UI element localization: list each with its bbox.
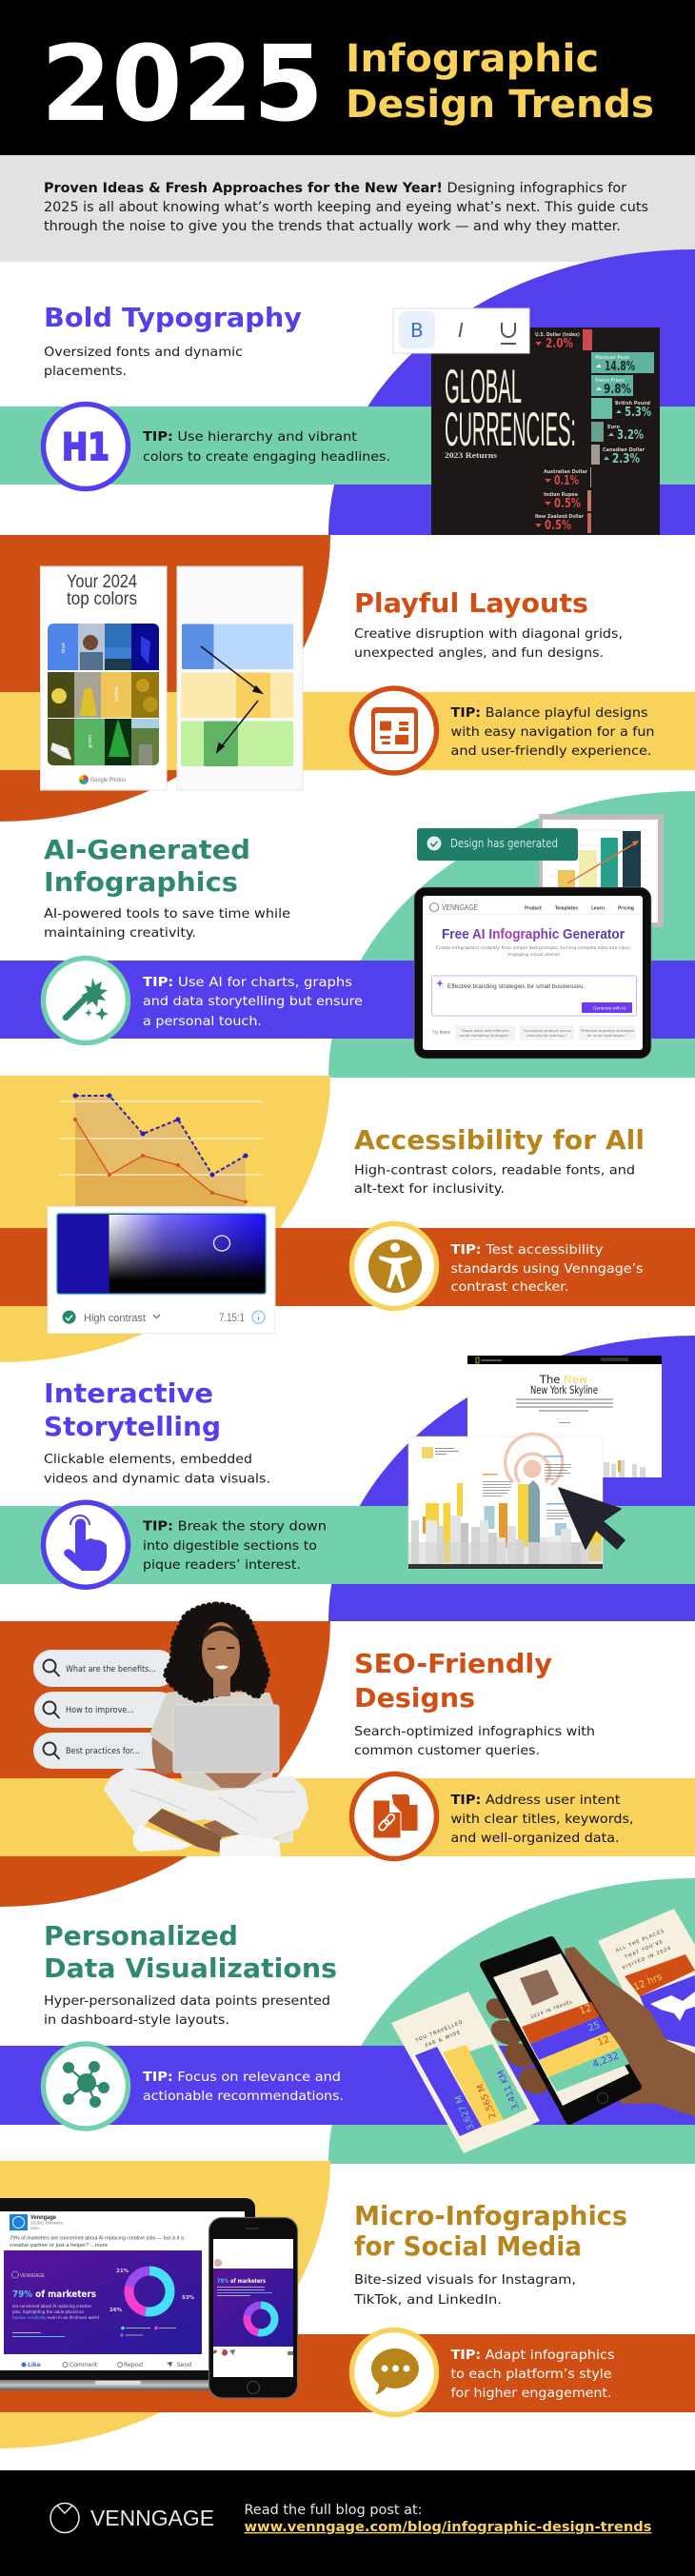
laptop with linkedin post: are concerned about AI replacing creative xyxy=(12,2304,92,2308)
tip: pique readers’ interest. xyxy=(143,1557,301,1573)
tablet: AI infographic generator: planning for startups." xyxy=(526,1033,567,1038)
tip: TIP: Focus on relevance and xyxy=(143,2070,341,2085)
tip: and well-organized data. xyxy=(451,1831,619,1846)
right travel card: 12 hrs xyxy=(632,1972,664,1993)
panel: personalized data visualizations xyxy=(0,1878,695,2164)
description: in dashboard-style layouts. xyxy=(44,2012,229,2028)
tablet: AI infographic generator: Pricing xyxy=(618,906,634,912)
global currencies chart image: 3.2% xyxy=(617,427,644,443)
global currencies chart image: New Zealand Dollar xyxy=(535,514,584,520)
description: Creative disruption with diagonal grids, xyxy=(354,626,623,642)
search query pills: What are the benefits... xyxy=(66,1665,156,1674)
global currencies chart image: U.S. Dollar (Index) xyxy=(535,332,580,338)
global currencies chart image: GLOBAL xyxy=(445,360,522,413)
heading xyxy=(44,1378,221,1442)
tip xyxy=(451,1242,644,1295)
tip xyxy=(143,429,390,465)
blog post link: Read the full blog post at: xyxy=(244,2503,423,2518)
tablet: AI infographic generator: Learn xyxy=(591,906,605,912)
title: Infographic Design Trends xyxy=(346,37,654,127)
global currencies chart image: 2.3% xyxy=(612,451,640,466)
description: AI-powered tools to save time while xyxy=(44,906,290,921)
tip: contrast checker. xyxy=(451,1279,569,1295)
blog post link xyxy=(244,2503,651,2535)
tip: TIP: Test accessibility xyxy=(451,1242,604,1258)
tip: actionable recommendations. xyxy=(143,2089,344,2104)
tablet: AI infographic generator: for small businesses." xyxy=(587,1033,627,1038)
title: Infographic Design Trends: Infographic xyxy=(346,37,599,81)
contrast checker card xyxy=(48,1207,275,1333)
laptop with linkedin post: 79% of marketers are concerned about AI replacing creative jobs — but is it a xyxy=(10,2235,185,2241)
laptop with linkedin post: Comment xyxy=(70,2362,98,2368)
laptop with linkedin post: 53% xyxy=(182,2295,195,2301)
card: top colors photo grid: blue xyxy=(61,643,67,653)
description xyxy=(354,626,623,661)
heading: SEO-Friendly xyxy=(354,1649,552,1679)
tip: and data storytelling but ensure xyxy=(143,994,363,1009)
global currencies chart image: 0.5% xyxy=(545,518,571,533)
icon: layout xyxy=(352,688,436,773)
global currencies chart image: 2.0% xyxy=(546,336,573,351)
venngage logo xyxy=(50,2504,214,2532)
global currencies chart image: 0.5% xyxy=(554,496,581,511)
right travel card: ALL THE PLACES xyxy=(615,1929,665,1954)
tip: into digestible sections to xyxy=(143,1538,317,1554)
laptop with linkedin post: human creativity even in an AI-driven world xyxy=(12,2315,99,2320)
laptop with linkedin post: Like xyxy=(28,2362,41,2368)
intro panel: Proven Ideas & Fresh Approaches for the New Year! Designing infographics for xyxy=(44,181,626,196)
heading: Personalized xyxy=(44,1921,238,1952)
tablet: AI infographic generator: Free AI Infographic Generator xyxy=(442,926,625,942)
tablet: AI infographic generator: "Boost sales with effective xyxy=(461,1028,509,1033)
heading: Bold Typography xyxy=(44,303,302,333)
card: top colors photo grid xyxy=(40,566,167,790)
laptop with linkedin post: Send xyxy=(177,2362,191,2368)
phone: travel report xyxy=(484,1940,638,2121)
tip: TIP: Balance playful designs xyxy=(451,705,647,721)
phone with instagram post: 79% of marketers xyxy=(217,2278,266,2285)
global currencies chart image: 2023 Returns xyxy=(445,451,497,460)
description xyxy=(354,1724,595,1758)
tip: with easy navigation for a fun xyxy=(451,724,655,740)
global currencies chart image: Canadian Dollar xyxy=(603,447,645,453)
laptop with linkedin post xyxy=(0,2198,255,2390)
global currencies chart image xyxy=(431,327,660,535)
phone: travel report: 12 xyxy=(578,2003,593,2017)
search query pills: Best practices for... xyxy=(66,1747,140,1756)
callout text blocks xyxy=(483,1456,571,1519)
description: videos and dynamic data visuals. xyxy=(44,1472,270,1487)
laptop with linkedin post: 26% xyxy=(109,2308,123,2313)
skyline buildings xyxy=(408,1480,603,1569)
icon: H1 xyxy=(44,404,128,489)
panel: ai-generated infographics xyxy=(0,791,695,1078)
laptop with linkedin post: 21% xyxy=(116,2269,129,2274)
laptop with linkedin post: 10,991 followers xyxy=(30,2220,64,2226)
badge: design has generated: Design has generated xyxy=(450,836,558,850)
laptop with linkedin post: Repost xyxy=(124,2362,144,2368)
description: Bite-sized visuals for Instagram, xyxy=(354,2272,576,2288)
icon: H1: H1 xyxy=(62,426,109,469)
contrast checker card: 7.15:1 xyxy=(219,1311,245,1324)
description: Hyper-personalized data points presented xyxy=(44,1993,330,2009)
card: diagonal layout diagram xyxy=(177,566,303,790)
tip: TIP: Use hierarchy and vibrant xyxy=(143,429,357,445)
cursor arrow xyxy=(559,1488,625,1549)
panel: seo-friendly designs xyxy=(0,1604,695,1907)
description xyxy=(354,1163,635,1197)
description xyxy=(44,1993,330,2028)
laptop with linkedin post: 1mo · xyxy=(30,2226,42,2230)
header banner xyxy=(0,0,695,155)
tip: TIP: Address user intent xyxy=(451,1793,621,1808)
line chart xyxy=(59,1093,263,1209)
title: 2025: 2025 xyxy=(41,23,324,145)
panel: bold typography xyxy=(0,249,695,535)
global currencies chart image: 14.8% xyxy=(605,359,635,374)
tip: TIP: Use AI for charts, graphs xyxy=(143,975,352,990)
heading xyxy=(354,1649,552,1714)
search query pills: How to improve... xyxy=(66,1706,134,1715)
description xyxy=(44,906,290,941)
global currencies chart image: 9.8% xyxy=(604,382,631,397)
card: top colors photo grid: Your 2024 xyxy=(67,572,137,592)
heading xyxy=(354,2201,627,2262)
tablet: AI infographic generator: Effective branding strategies for small businesses. xyxy=(447,984,585,990)
tablet: AI infographic generator: VENNGAGE xyxy=(442,903,478,912)
left travel card: 3,627 M xyxy=(453,2093,477,2131)
tip xyxy=(451,1793,634,1846)
phone: travel report: 4,232 xyxy=(591,2051,621,2071)
tablet: AI infographic generator: Try these xyxy=(432,1030,450,1036)
description: common customer queries. xyxy=(354,1743,540,1758)
search query pills xyxy=(33,1650,177,1769)
panel: interactive storytelling xyxy=(0,1336,695,1621)
heading: Micro-Infographics xyxy=(354,2201,627,2231)
icon: network nodes xyxy=(44,2044,128,2129)
intro panel: 2025 is all about knowing what’s worth keeping and eyeing what’s next. This guide cuts xyxy=(44,200,648,215)
description: alt-text for inclusivity. xyxy=(354,1181,505,1197)
right travel card xyxy=(598,1909,695,2056)
laptop with linkedin post: VENNGAGE xyxy=(20,2273,46,2279)
venngage logo: VENNGAGE xyxy=(90,2506,214,2530)
description: Search-optimized infographics with xyxy=(354,1724,595,1739)
footer xyxy=(0,2470,695,2576)
card: top colors photo grid: yellow xyxy=(114,686,120,702)
tip: TIP: Break the story down xyxy=(143,1519,327,1535)
heading: Data Visualizations xyxy=(44,1953,337,1984)
right travel card: THAT YOU'VE xyxy=(623,1939,665,1961)
tip xyxy=(451,705,655,759)
left travel card: FAR & WIDE xyxy=(425,2030,462,2049)
card: top colors photo grid: Google Photos xyxy=(90,777,127,783)
hand holding phone xyxy=(483,1947,695,2116)
laptop with linkedin post: jobs, highlighting the value placed on xyxy=(11,2309,84,2314)
text format toolbar: B xyxy=(410,319,424,342)
radar rings xyxy=(506,1434,563,1485)
bar chart card xyxy=(539,814,664,927)
tip: for higher engagement. xyxy=(451,2386,611,2401)
phone: travel report: 2024 IN TRAVEL xyxy=(530,1999,574,2020)
tablet: AI infographic generator: Templates xyxy=(555,906,578,912)
global currencies chart image: British Pound xyxy=(615,401,650,406)
tip: with clear titles, keywords, xyxy=(451,1812,634,1827)
icon: linked documents xyxy=(352,1774,436,1858)
woman with laptop xyxy=(105,1604,308,1856)
text format toolbar: I xyxy=(458,319,464,342)
tip xyxy=(143,2070,344,2104)
tip: colors to create engaging headlines. xyxy=(143,449,390,465)
screenshot: new york skyline intro xyxy=(467,1356,662,1477)
global currencies chart image: Mexican Peso xyxy=(595,355,629,361)
panel: playful layouts xyxy=(0,535,695,822)
description: Oversized fonts and dynamic xyxy=(44,345,243,360)
heading: Infographics xyxy=(44,867,238,898)
tablet: AI infographic generator: "Effective branding strategies xyxy=(580,1028,634,1033)
icon: tapping hand xyxy=(44,1502,128,1587)
screenshot: interactive skyline xyxy=(408,1434,603,1569)
tablet: AI infographic generator: "Innovative product launch xyxy=(523,1028,572,1033)
left travel card: 3,411 KM xyxy=(496,2068,522,2111)
description xyxy=(44,1452,270,1487)
tablet: AI infographic generator: Product xyxy=(525,906,542,912)
tip xyxy=(451,2348,615,2401)
global currencies chart image: 0.1% xyxy=(554,473,579,488)
intro panel xyxy=(0,155,695,262)
screenshot: new york skyline intro: New York Skyline xyxy=(530,1383,598,1397)
left travel card: YOU TRAVELLED xyxy=(414,2019,465,2044)
tip: a personal touch. xyxy=(143,1014,262,1029)
global currencies chart image: Indian Rupee xyxy=(544,492,578,498)
contrast checker card: High contrast xyxy=(84,1313,146,1324)
heading: for Social Media xyxy=(354,2231,582,2262)
heading: Designs xyxy=(354,1683,475,1714)
tip xyxy=(143,1519,327,1573)
intro panel: through the noise to give you the trends that actually work — and why they matter. xyxy=(44,219,621,234)
tip: TIP: Adapt infographics xyxy=(451,2348,615,2363)
global currencies chart image: Euro xyxy=(607,425,620,430)
heading: Accessibility for All xyxy=(354,1125,645,1156)
tablet: AI infographic generator: engaging visual stories xyxy=(507,952,561,958)
card: top colors photo grid: green xyxy=(88,735,93,748)
tip: standards using Venngage’s xyxy=(451,1261,644,1277)
tablet: AI infographic generator: Generate with AI xyxy=(593,1005,626,1011)
laptop with linkedin post: creative partner or just a helper? ...more xyxy=(10,2243,108,2249)
laptop with linkedin post: Venngage xyxy=(30,2214,56,2221)
tip xyxy=(143,975,363,1029)
badge: design has generated xyxy=(417,828,578,861)
card: top colors photo grid: top colors xyxy=(67,589,137,609)
heading xyxy=(44,1921,337,1984)
icon: magic wand xyxy=(44,958,128,1043)
heading: AI-Generated xyxy=(44,835,250,865)
tablet: AI infographic generator xyxy=(414,887,651,1059)
phone with instagram post xyxy=(209,2218,297,2398)
description xyxy=(44,345,243,379)
global currencies chart image: 5.3% xyxy=(625,405,651,420)
heading: Playful Layouts xyxy=(354,588,588,619)
global currencies chart image: Australian Dollar xyxy=(544,469,587,475)
description xyxy=(353,2272,576,2308)
text format toolbar xyxy=(393,308,529,353)
phone: travel report: 12 xyxy=(596,2034,611,2049)
description: maintaining creativity. xyxy=(44,925,196,941)
blog post link: www.venngage.com/blog/infographic-design-trends xyxy=(244,2520,651,2535)
screenshot: new york skyline intro: The New xyxy=(539,1373,587,1386)
heading xyxy=(44,835,250,898)
icon: accessibility person xyxy=(352,1224,436,1308)
heading: Storytelling xyxy=(44,1412,221,1442)
tablet: AI infographic generator: Create infographics instantly from simple text prompts, turning complex data into clear, xyxy=(436,945,631,951)
heading: Interactive xyxy=(44,1378,213,1409)
tablet: AI infographic generator: social marketing strategies." xyxy=(459,1033,511,1038)
laptop with linkedin post: 79% of marketers xyxy=(12,2289,96,2300)
left travel card xyxy=(391,1991,540,2153)
left travel card: 2,565 M xyxy=(475,2082,499,2120)
phone: travel report: 25 xyxy=(586,2020,602,2034)
global currencies chart image: Swiss Franc xyxy=(595,378,625,384)
tip: to each platform’s style xyxy=(451,2367,611,2382)
description: High-contrast colors, readable fonts, and xyxy=(354,1163,635,1179)
description: TikTok, and LinkedIn. xyxy=(353,2292,502,2308)
icon: speech bubble xyxy=(352,2330,436,2414)
description: placements. xyxy=(44,364,127,379)
panel: micro-infographics xyxy=(0,2161,695,2448)
panel: accessibility for all xyxy=(0,1076,695,1362)
description: unexpected angles, and fun designs. xyxy=(354,645,604,661)
arrows xyxy=(201,646,262,752)
tip: and user-friendly experience. xyxy=(451,743,651,759)
title: Infographic Design Trends: Design Trends xyxy=(346,83,654,127)
right travel card: VISITED IN 2024 xyxy=(622,1945,672,1972)
description: Clickable elements, embedded xyxy=(44,1452,252,1467)
